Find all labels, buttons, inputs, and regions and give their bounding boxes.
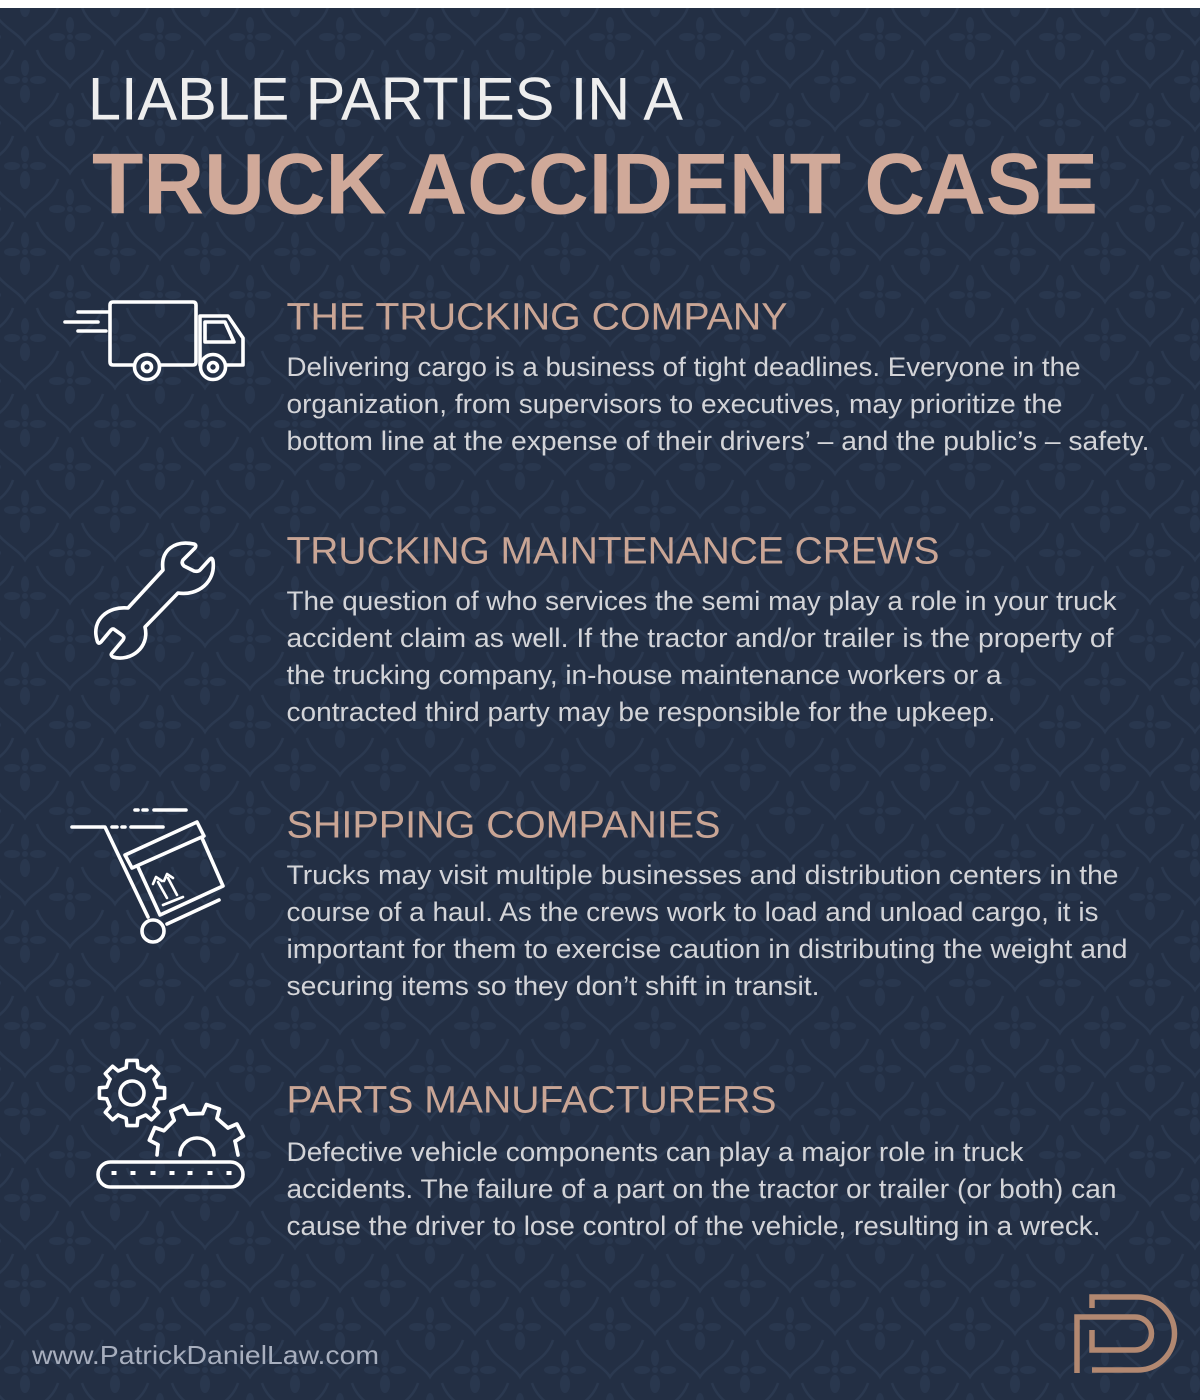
icon: moving truck: [65, 302, 243, 380]
title line 1: LIABLE PARTIES IN A: [88, 66, 683, 132]
body text: accidents. The failure of a part on the tractor or trailer (or both) can: [286, 1174, 1116, 1204]
body text: [286, 1137, 1116, 1241]
heading: TRUCKING MAINTENANCE CREWS: [286, 530, 939, 572]
title: [88, 66, 1098, 232]
website url: www.PatrickDanielLaw.com: [31, 1340, 379, 1370]
body text: cause the driver to lose control of the vehicle, resulting in a wreck.: [286, 1211, 1100, 1241]
icon: wrench: [96, 543, 213, 658]
logo: PD monogram: [1077, 1297, 1174, 1373]
panel: trucking maintenance crews: [96, 530, 1117, 727]
panel: shipping companies: [72, 804, 1128, 1001]
body text: the trucking company, in-house maintenance workers or a: [286, 660, 1003, 690]
body text: Defective vehicle components can play a major role in truck: [286, 1137, 1024, 1167]
body text: accident claim as well. If the tractor and/or trailer is the property of: [286, 623, 1114, 653]
body text: important for them to exercise caution in distributing the weight and: [286, 934, 1128, 964]
body text: [286, 352, 1150, 456]
title line 2: TRUCK ACCIDENT CASE: [92, 136, 1098, 232]
heading: PARTS MANUFACTURERS: [286, 1080, 776, 1122]
body text: [286, 586, 1117, 727]
panel: parts manufacturers: [98, 1060, 1116, 1241]
icon: hand truck with box: [72, 810, 223, 942]
body text: Delivering cargo is a business of tight deadlines. Everyone in the: [286, 352, 1080, 382]
heading: THE TRUCKING COMPANY: [286, 296, 788, 338]
heading: SHIPPING COMPANIES: [286, 804, 720, 846]
body text: organization, from supervisors to executives, may prioritize the: [286, 389, 1062, 419]
body text: The question of who services the semi may play a role in your truck: [286, 586, 1117, 616]
icon: conveyor dots: [112, 1171, 232, 1175]
icon: gears on conveyor: [98, 1060, 244, 1187]
body text: securing items so they don’t shift in transit.: [286, 971, 820, 1001]
body text: course of a haul. As the crews work to load and unload cargo, it is: [286, 897, 1098, 927]
body text: [286, 860, 1128, 1001]
body text: bottom line at the expense of their drivers’ – and the public’s – safety.: [286, 426, 1150, 456]
body text: contracted third party may be responsible for the upkeep.: [286, 697, 996, 727]
body text: Trucks may visit multiple businesses and distribution centers in the: [286, 860, 1118, 890]
panel: the trucking company: [65, 296, 1150, 456]
